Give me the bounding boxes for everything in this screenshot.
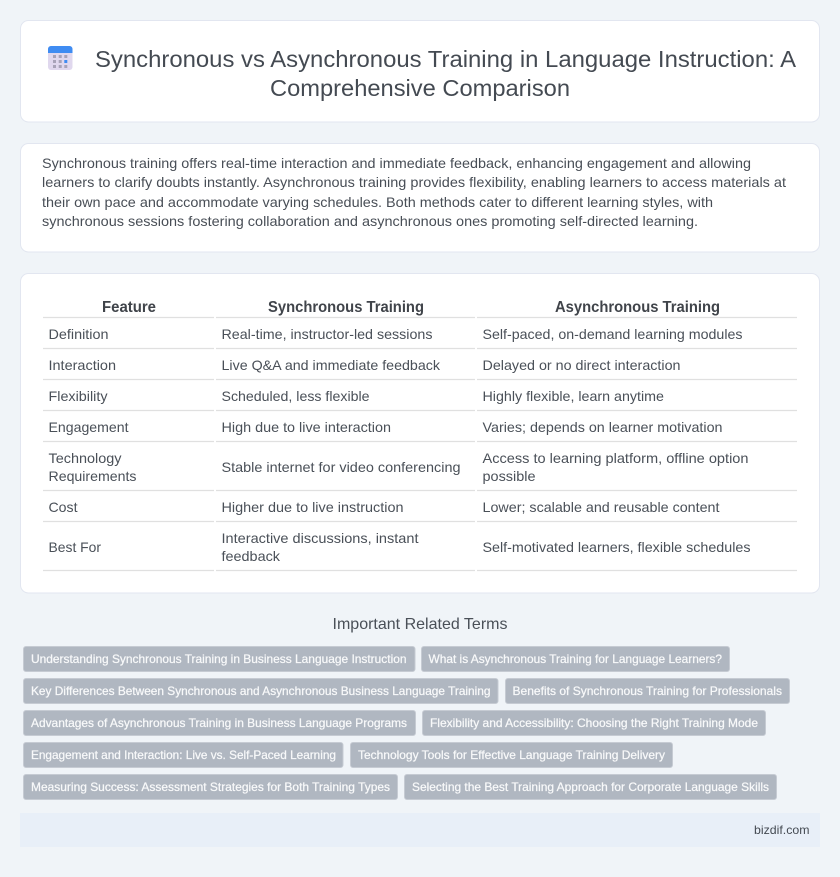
row: technology requirements: Requirements — [48, 468, 136, 484]
tag: Technology Tools for Effective Language Training Delivery — [358, 748, 665, 762]
title — [95, 46, 796, 101]
tag — [24, 678, 498, 704]
panel: header — [20, 20, 820, 122]
row: best for: Interactive discussions, instant — [222, 530, 419, 546]
tag: Measuring Success: Assessment Strategies for Both Training Types — [31, 780, 390, 794]
tag: Engagement and Interaction: Live vs. Self-Paced Learning — [31, 748, 336, 762]
row: definition — [43, 326, 797, 348]
tag — [422, 646, 730, 672]
title: Synchronous vs Asynchronous Training in Language Instruction: A — [95, 46, 796, 72]
row: interaction: Interaction — [48, 357, 116, 373]
row: best for — [43, 530, 797, 570]
tag: Key Differences Between Synchronous and Asynchronous Business Language Training — [31, 684, 490, 698]
tag: Understanding Synchronous Training in Business Language Instruction — [31, 652, 406, 666]
row: cost: Lower; scalable and reusable content — [482, 499, 720, 515]
footer — [20, 813, 820, 847]
tag: Selecting the Best Training Approach for Corporate Language Skills — [412, 780, 769, 794]
row: technology requirements: Technology — [48, 450, 122, 466]
title: Comprehensive Comparison — [270, 75, 570, 101]
row: best for: Best For — [48, 539, 101, 555]
row: engagement: High due to live interaction — [222, 419, 391, 435]
footer: bizdif.com — [754, 823, 810, 837]
row: technology requirements: Stable internet for video conferencing — [222, 459, 460, 475]
row: interaction — [43, 357, 797, 380]
icon: calendar — [48, 46, 72, 70]
row: engagement — [43, 419, 797, 442]
tag: Benefits of Synchronous Training for Professionals — [512, 684, 782, 698]
row: engagement: Engagement — [48, 419, 129, 435]
tag — [422, 710, 766, 736]
table header: Feature — [102, 299, 156, 316]
row: flexibility: Flexibility — [48, 388, 108, 404]
row: engagement: Varies; depends on learner motivation — [482, 419, 722, 435]
tag: Flexibility and Accessibility: Choosing the Right Training Mode — [430, 716, 758, 730]
tag — [24, 646, 415, 672]
panel: related term tags — [24, 646, 790, 800]
summary text — [42, 155, 786, 229]
row: definition: Definition — [48, 326, 108, 342]
summary text: Synchronous training offers real-time interaction and immediate feedback, enhancing engagement and allowing — [42, 155, 751, 171]
tag: Advantages of Asynchronous Training in Business Language Programs — [31, 716, 407, 730]
row: flexibility — [43, 388, 797, 410]
row: technology requirements — [43, 450, 797, 490]
tag — [506, 678, 790, 704]
tag — [404, 774, 776, 800]
row: best for: Self-motivated learners, flexible schedules — [482, 539, 750, 555]
related terms heading: Important Related Terms — [332, 616, 508, 633]
row: technology requirements: possible — [482, 468, 536, 484]
tag: What is Asynchronous Training for Language Learners? — [428, 652, 722, 666]
row: best for: feedback — [222, 548, 281, 564]
panel: comparison table — [20, 274, 820, 593]
summary text: synchronous sessions fostering collaboration and asynchronous ones promoting self-directed learning. — [42, 213, 698, 229]
summary text: their own pace and accommodate varying schedules. Both methods cater to different learning styles, with — [42, 194, 713, 210]
tag — [24, 710, 416, 736]
tag — [350, 742, 672, 768]
tag — [24, 742, 343, 768]
row: technology requirements: Access to learning platform, offline option — [482, 450, 748, 466]
row: cost: Higher due to live instruction — [222, 499, 404, 515]
row: interaction: Delayed or no direct interaction — [482, 357, 680, 373]
table header: Synchronous Training — [268, 299, 424, 316]
row: flexibility: Scheduled, less flexible — [222, 388, 370, 404]
row: cost — [43, 499, 797, 522]
table header: Asynchronous Training — [555, 299, 720, 316]
row: interaction: Live Q&A and immediate feedback — [222, 357, 441, 373]
row: flexibility: Highly flexible, learn anytime — [482, 388, 664, 404]
row: cost: Cost — [48, 499, 78, 515]
table header — [43, 299, 797, 318]
row: definition: Real-time, instructor-led sessions — [222, 326, 432, 342]
row: definition: Self-paced, on-demand learning modules — [482, 326, 742, 342]
panel: summary — [20, 144, 820, 252]
summary text: learners to clarify doubts instantly. Asynchronous training provides flexibility, enabling learners to access materials at — [42, 174, 786, 190]
tag — [24, 774, 398, 800]
